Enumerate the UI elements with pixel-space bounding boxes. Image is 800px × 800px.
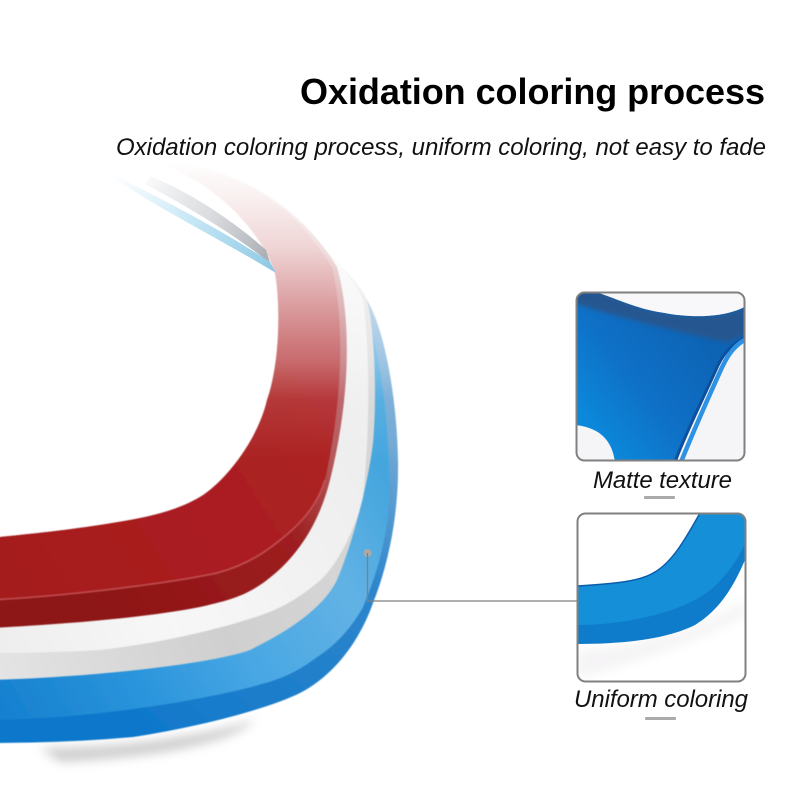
silver ring: [0, 250, 375, 680]
far-side grey strip: [145, 176, 270, 263]
red ring: [0, 165, 347, 628]
far-side light blue strip: [115, 176, 276, 273]
label: matte texture: Matte texture: [593, 467, 732, 494]
white fade over the upper rings: [100, 160, 420, 460]
inset frame: [576, 292, 744, 460]
title: Oxidation coloring process: [300, 71, 765, 112]
inset: uniform coloring: [577, 513, 747, 683]
label underline: matte texture: [644, 496, 675, 499]
label underline: uniform coloring: [645, 717, 676, 720]
label: uniform coloring: Uniform coloring: [574, 686, 749, 713]
callout leader line: [364, 549, 578, 601]
inset photo: [577, 513, 747, 683]
inset photo: [578, 294, 744, 460]
subtitle: Oxidation coloring process, uniform coloring, not easy to fade: [116, 134, 766, 161]
blue ring: [0, 280, 398, 743]
product photo: three layered trim rings: [0, 160, 420, 762]
inset: matte texture: [570, 288, 750, 462]
ground shadow: [40, 720, 255, 762]
inset frame: [578, 514, 746, 682]
